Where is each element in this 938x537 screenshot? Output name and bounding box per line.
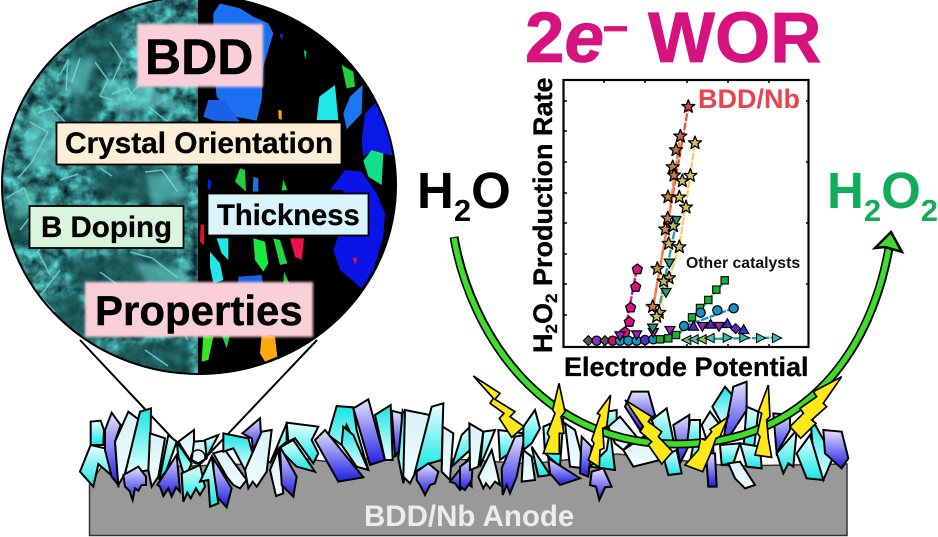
label: Properties: Properties xyxy=(95,287,303,334)
label: Thickness: Thickness xyxy=(217,200,360,232)
magnified circle: BDD micrograph and orientation map xyxy=(0,0,408,390)
label: BDD/Nb Anode: BDD/Nb Anode xyxy=(364,500,574,533)
anode substrate xyxy=(90,454,847,536)
title: 2e- WOR: WOR xyxy=(648,0,822,78)
crystal film: left section xyxy=(80,399,472,507)
y-axis label: H xyxy=(528,334,558,353)
orientation map half xyxy=(198,0,395,373)
crystal film: right section xyxy=(460,382,848,500)
label: H2O reactant: H xyxy=(417,162,454,219)
label: H2O reactant: 2 xyxy=(454,193,471,228)
green reaction arrow xyxy=(454,232,902,444)
label: H2O2 product: H xyxy=(827,162,864,219)
label: H2O2 product: O xyxy=(881,162,921,219)
connector lines from magnified circle to crystal film xyxy=(80,340,317,457)
label: Crystal Orientation: Crystal Orientation xyxy=(65,127,333,160)
label: B Doping xyxy=(30,206,184,248)
small circle at magnified spot xyxy=(191,450,205,464)
label: BDD/Nb series: BDD/Nb xyxy=(698,84,800,114)
BDD/Nb star markers xyxy=(646,100,702,322)
chart: H2O2 production rate xyxy=(564,80,809,347)
title: 2e- WOR: e xyxy=(564,0,604,78)
y-axis label: Production Rate xyxy=(528,78,558,294)
other catalyst markers xyxy=(583,264,782,346)
data lines xyxy=(625,107,777,339)
lightning bolts xyxy=(473,376,842,472)
label: Thickness xyxy=(208,194,368,236)
label: BDD: BDD xyxy=(145,29,253,85)
label: other catalysts: Other catalysts xyxy=(686,255,800,272)
y-axis label: O xyxy=(528,303,558,324)
SEM micrograph half xyxy=(0,0,198,390)
x-axis label: Electrode Potential xyxy=(564,352,809,382)
label: H2O reactant: O xyxy=(471,162,511,219)
label: B Doping: B Doping xyxy=(41,211,172,244)
label: H2O2 product: 2 xyxy=(864,193,881,228)
label: H2O2 product: 2 xyxy=(921,193,938,228)
y-axis label: 2 xyxy=(542,294,561,303)
y-axis label: 2 xyxy=(542,324,561,334)
title: 2e- WOR: 2 xyxy=(525,0,564,78)
title: 2e- WOR: – xyxy=(603,0,628,51)
